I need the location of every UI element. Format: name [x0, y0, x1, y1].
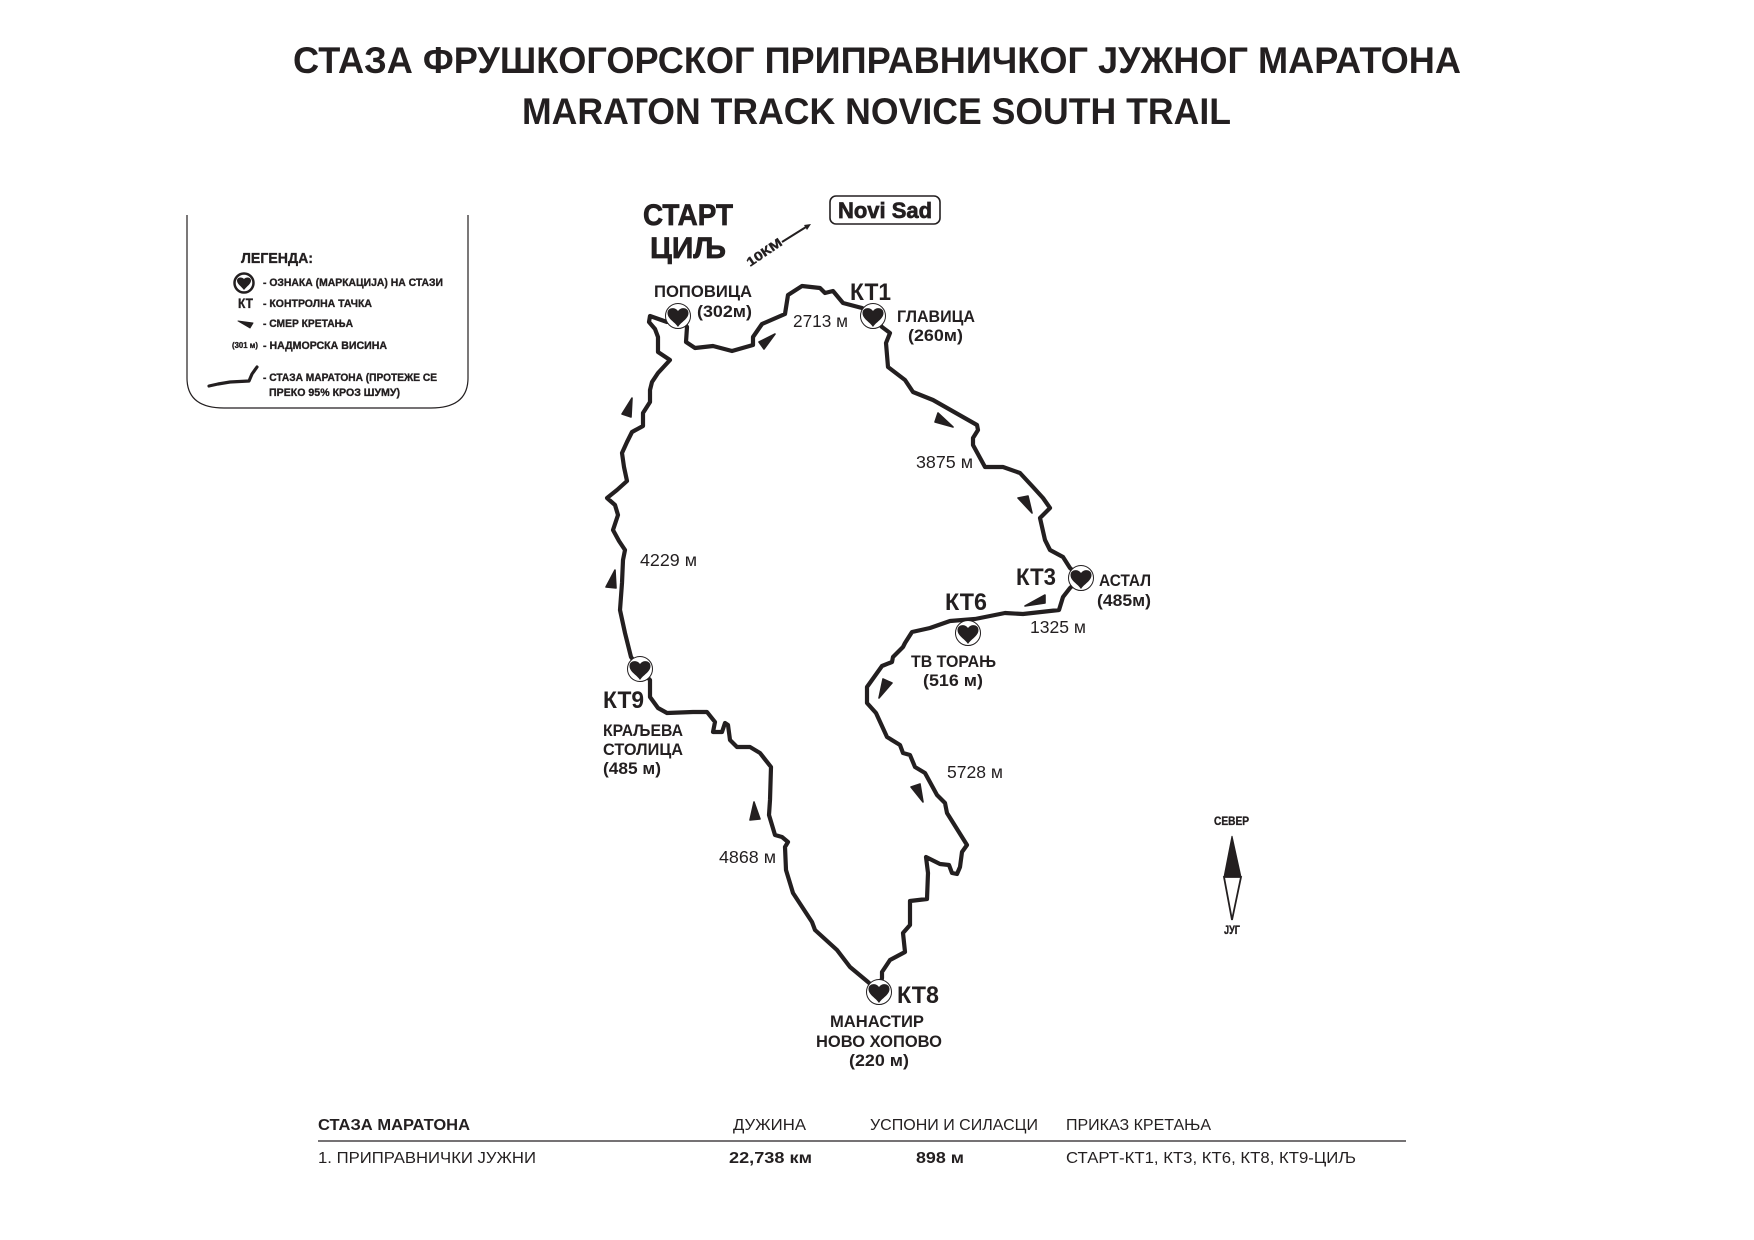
table header: ПРИКАЗ КРЕТАЊА [1066, 1117, 1211, 1134]
compass [1214, 816, 1249, 937]
label: КТ1: КТ1 [850, 279, 891, 306]
arrow: 10 km to Novi Sad [744, 224, 811, 269]
legend row: altitude: - НАДМОРСКА ВИСИНА [263, 340, 387, 352]
table header [318, 1117, 1211, 1134]
legend row: trail marker [234, 274, 443, 292]
legend row: direction: - СМЕР КРЕТАЊА [263, 318, 353, 330]
summary table [318, 1117, 1406, 1167]
marker: Поповица [666, 304, 690, 328]
label: КТ3: КТ3 [1016, 564, 1056, 591]
table row: 1. ПРИПРАВНИЧКИ ЈУЖНИ [318, 1150, 536, 1167]
marker: КТ8 Манастир Ново Хопово [866, 980, 892, 1004]
distance: 4868 м: 4868 м [719, 847, 776, 867]
label: Главица: (260м) [908, 326, 963, 345]
legend row: checkpoint [238, 295, 372, 311]
label: ТВ Торањ: (516 м) [923, 671, 983, 690]
label: КТ9: КТ9 [603, 687, 644, 714]
label: Астал: АСТАЛ [1099, 571, 1151, 590]
distance: 3875 м: 3875 м [916, 452, 973, 472]
legend row: marathon track [209, 367, 437, 399]
label: Манастир Ново Хопово [816, 1012, 942, 1070]
legend row: checkpoint: - КОНТРОЛНА ТАЧКА [263, 298, 372, 310]
table row: 898 м [916, 1150, 964, 1167]
legend row: trail marker: - ОЗНАКА (МАРКАЦИЈА) НА СТАЗИ [263, 277, 443, 289]
legend row: checkpoint: КТ [238, 295, 253, 311]
label: Краљева столица: (485 м) [603, 759, 661, 778]
label: Манастир Ново Хопово: НОВО ХОПОВО [816, 1032, 942, 1051]
compass: СЕВЕР [1214, 816, 1249, 828]
table row: 22,738 км [729, 1150, 812, 1167]
label: КТ6: КТ6 [945, 589, 987, 616]
legend row: marathon track: ПРЕКО 95% КРОЗ ШУМУ) [269, 387, 400, 399]
start and finish label [643, 199, 733, 265]
title: MARATON TRACK NOVICE SOUTH TRAIL [522, 91, 1231, 132]
legend row: altitude: (301 м) [232, 341, 258, 350]
label: Астал: (485м) [1097, 591, 1151, 610]
label: Астал [1097, 571, 1151, 610]
label: Краљева столица: СТОЛИЦА [603, 740, 683, 759]
legend row: marathon track: - СТАЗА МАРАТОНА (ПРОТЕЖЕ СЕ [263, 372, 437, 384]
start and finish label: СТАРТ [643, 199, 733, 232]
label: Манастир Ново Хопово: (220 м) [849, 1051, 909, 1070]
label: Краљева столица [603, 721, 683, 778]
label: Главица: ГЛАВИЦА [897, 307, 975, 326]
marathon track line [607, 286, 1081, 992]
title: СТАЗА ФРУШКОГОРСКОГ ПРИПРАВНИЧКОГ ЈУЖНОГ МАРАТОНА [293, 40, 1461, 81]
label: Главица [897, 307, 975, 345]
label: Краљева столица: КРАЉЕВА [603, 721, 683, 740]
marker: КТ3 Астал [1068, 566, 1094, 590]
label: Манастир Ново Хопово: МАНАСТИР [830, 1012, 924, 1031]
distance: 4229 м: 4229 м [640, 550, 697, 570]
legend heading: ЛЕГЕНДА: [241, 250, 313, 267]
label: КТ8: КТ8 [897, 982, 939, 1009]
distance: 5728 м: 5728 м [947, 762, 1003, 782]
label: ТВ Торањ: ТВ ТОРАЊ [911, 652, 996, 671]
marker: КТ9 Краљева столица [628, 656, 652, 682]
start and finish label: ЦИЉ [650, 232, 726, 265]
label: Поповица: ПОПОВИЦА [654, 282, 752, 301]
arrow: 10 km to Novi Sad: 10КМ [744, 236, 785, 269]
title [293, 40, 1461, 132]
table header: СТАЗА МАРАТОНА [318, 1117, 470, 1134]
Novi Sad sign: Novi Sad [838, 198, 932, 223]
label: Поповица [654, 282, 752, 321]
table row [318, 1150, 1356, 1167]
label: ТВ Торањ [911, 652, 996, 690]
table header: ДУЖИНА [733, 1117, 806, 1134]
marker: КТ1 Главица [860, 304, 886, 328]
table header: УСПОНИ И СИЛАСЦИ [870, 1117, 1038, 1134]
compass: ЈУГ [1224, 925, 1240, 937]
panel: legend [187, 215, 468, 408]
distance: 1325 м: 1325 м [1030, 617, 1086, 637]
marker: КТ6 ТВ Торањ [956, 620, 980, 646]
distance: 2713 м: 2713 м [793, 311, 848, 331]
direction arrows [606, 334, 1045, 820]
label: Поповица: (302м) [697, 302, 752, 321]
table row: СТАРТ-КТ1, КТ3, КТ6, КТ8, КТ9-ЦИЉ [1066, 1150, 1356, 1167]
